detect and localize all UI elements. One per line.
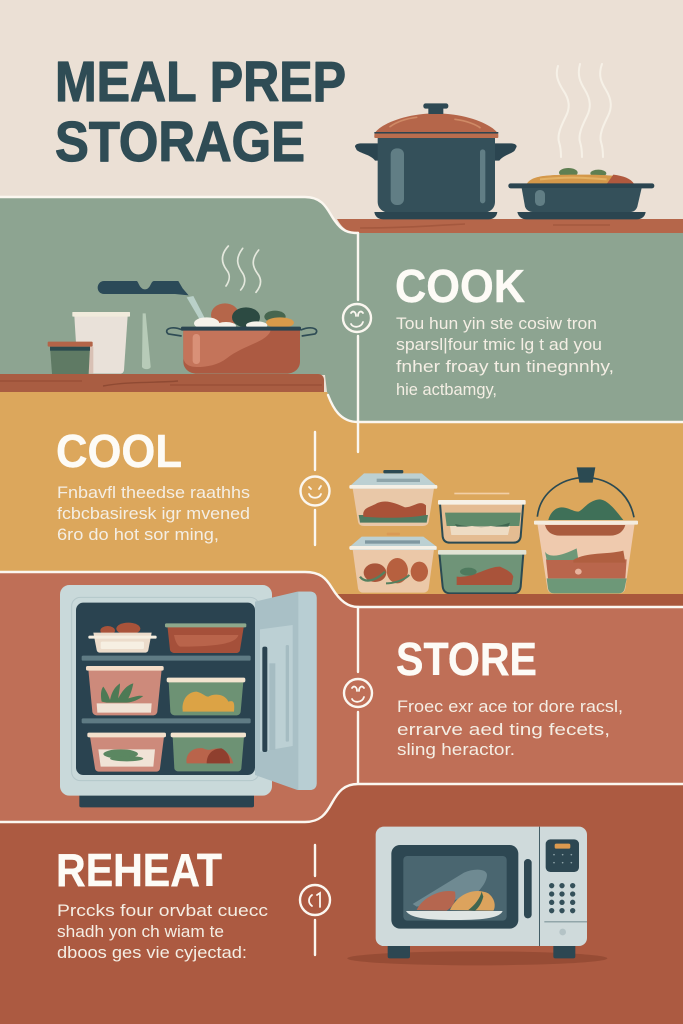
shelf: top wood shelf bbox=[337, 219, 683, 233]
text: cook body: sparsl|four tmic lg t ad you bbox=[396, 336, 602, 354]
panel: store band bbox=[0, 572, 683, 822]
container: greens bbox=[87, 733, 166, 772]
title: STORAGE bbox=[55, 110, 305, 174]
icon: container 4 bbox=[438, 550, 526, 593]
fridge door bbox=[255, 592, 317, 790]
icon: step badge reheat bbox=[300, 885, 330, 915]
text: store body: errarve aed ting fecets, bbox=[397, 721, 610, 739]
step heading: COOL: COOL bbox=[56, 425, 182, 477]
icon: step badge store bbox=[344, 679, 372, 707]
text: reheat body: dboos ges vie cyjectad: bbox=[57, 944, 247, 962]
icon: container lidded 1 bbox=[349, 470, 437, 526]
container: dumplings bbox=[167, 678, 245, 715]
text: cool body: fcbcbasiresk igr mvened bbox=[57, 505, 250, 523]
fridge shelves bbox=[82, 656, 251, 723]
text: cool body: 6ro do hot sor ming, bbox=[57, 526, 219, 544]
icon: small steam bbox=[222, 246, 261, 292]
container: red dish bbox=[165, 623, 246, 653]
icon: stock pot bbox=[355, 103, 517, 219]
text: reheat body: Prccks four orvbat cuecc bbox=[57, 902, 268, 920]
text: cool body bbox=[57, 484, 250, 544]
icon: cook illustration bbox=[48, 246, 317, 374]
icon: containers illustration bbox=[349, 467, 638, 593]
text: reheat body bbox=[57, 902, 268, 962]
text: cook body: Tou hun yin ste cosiw tron bbox=[396, 315, 597, 333]
shelf: cook wood counter bbox=[0, 374, 324, 392]
connector: section divider lines bbox=[0, 197, 683, 955]
text: cook body: fnher froay tun tinegnnhy, bbox=[396, 358, 614, 376]
step heading: STORE: STORE bbox=[396, 633, 537, 685]
title: MEAL PREP bbox=[55, 50, 346, 114]
icon: pouring ladle bbox=[98, 281, 205, 320]
panel: cook band bbox=[0, 197, 683, 421]
panel: cool band bbox=[0, 392, 683, 606]
icon: baking dish bbox=[508, 168, 654, 219]
icon: copper pot bbox=[167, 327, 317, 374]
control panel bbox=[544, 839, 587, 935]
text: store body: sling heractor. bbox=[397, 741, 515, 759]
fridge base bbox=[79, 793, 254, 807]
microwave body bbox=[376, 827, 587, 946]
container: herbs bbox=[86, 666, 164, 715]
icon: step badge cook bbox=[343, 304, 371, 332]
icon: microwave bbox=[347, 827, 607, 965]
shelf: cool wood shelf bbox=[335, 594, 683, 606]
text: store body bbox=[397, 698, 623, 759]
icon: step badge cool bbox=[300, 476, 330, 506]
title bbox=[55, 50, 346, 174]
text: reheat body: shadh yon ch wiam te bbox=[57, 923, 224, 941]
step heading: REHEAT: REHEAT bbox=[56, 844, 222, 896]
icon: large handled jar bbox=[534, 467, 638, 593]
text: cook body: hie actbamgy, bbox=[396, 381, 497, 399]
icon: food in pot bbox=[194, 303, 294, 330]
icon: green cup bbox=[48, 342, 93, 374]
icon: container 2 bbox=[438, 493, 526, 543]
icon: container 3 bbox=[349, 533, 437, 593]
icon: open fridge bbox=[60, 585, 317, 807]
step heading: COOK: COOK bbox=[395, 260, 525, 312]
container: meat bbox=[171, 733, 246, 771]
container: small tray bbox=[88, 623, 157, 653]
icon: steam over pots bbox=[557, 64, 611, 157]
door handle bbox=[524, 859, 532, 918]
text: cool body: Fnbavfl theedse raathhs bbox=[57, 484, 250, 502]
text: cook body bbox=[396, 315, 614, 399]
text: store body: Froec exr ace tor dore racsl, bbox=[397, 698, 623, 716]
feet bbox=[388, 943, 575, 958]
fridge body bbox=[60, 585, 272, 796]
icon: tall glass bbox=[142, 313, 151, 369]
panel: header background bbox=[0, 0, 683, 240]
panel: reheat band bbox=[0, 784, 683, 1024]
icon: cream cup bbox=[72, 312, 130, 374]
shadow bbox=[347, 951, 607, 965]
window bbox=[391, 845, 518, 929]
